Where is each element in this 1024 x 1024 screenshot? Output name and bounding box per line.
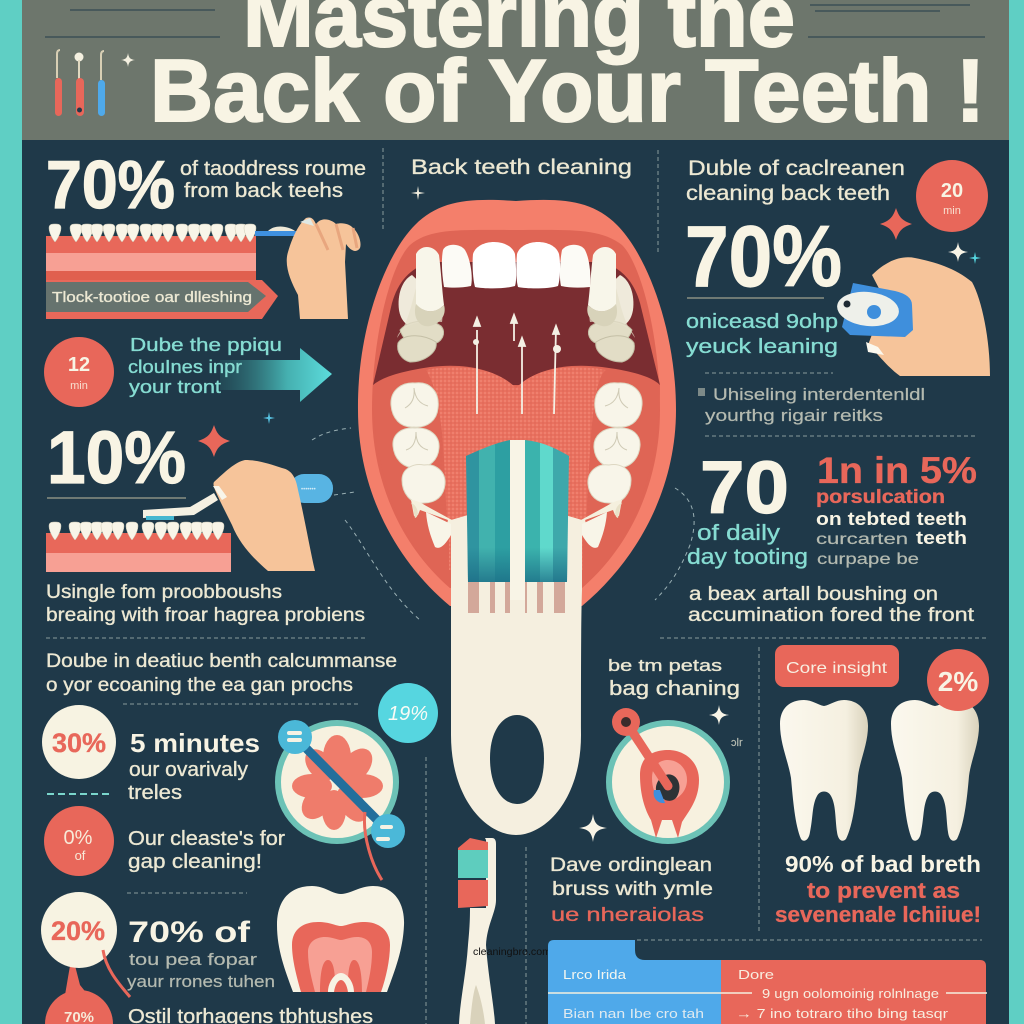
header band (22, 0, 1009, 140)
icon: gum pick diagram (609, 708, 727, 841)
text: interdental note: Uhiseling interdentenldl (713, 385, 925, 404)
text: teal note (686, 311, 838, 358)
stat: 70 daily: of daily (697, 520, 780, 545)
table: comparison: 9 ugn oolomoinig rolnlnage (762, 986, 939, 1001)
text: plaque note: clouInes inpr (128, 357, 242, 377)
arrow: teal (220, 348, 332, 402)
illustration: small toothbrush (458, 838, 496, 1024)
badge: 20 min (916, 160, 988, 232)
icon: sparkle white upper (709, 705, 729, 725)
stat: 1n in 5 percent: porsulcation (816, 487, 945, 508)
badge: 30 percent: 30% (52, 728, 106, 758)
badge: 19 percent: 19% (388, 703, 428, 725)
text: bag cleaning: be tm petas (608, 656, 722, 675)
text: bad breath (775, 851, 981, 927)
stat: 70 percent top left: from back teehs (184, 180, 343, 202)
badge: 0 percent: of (75, 848, 86, 863)
table: comparison: Bian nan Ibe cro tah (563, 1006, 704, 1021)
text: brushing note (688, 584, 975, 626)
icon: two molars (780, 700, 979, 841)
small note glyph: ɔlr (731, 737, 743, 749)
text: gap cleaning: Our cleaste's for (128, 828, 285, 850)
heading: back teeth cleaning (411, 156, 632, 200)
icon: hand with toothbrush (255, 217, 361, 319)
badge: 2 percent (927, 649, 989, 711)
badge: 12 min: min (70, 380, 88, 392)
badge: 20 min: min (943, 205, 961, 217)
stat: 1n in 5 percent: curpape be (817, 551, 919, 568)
icon: sparkle red (198, 425, 230, 457)
text: bad breath: sevenenale lchiiue! (775, 902, 981, 927)
badge: 20 percent with pin (41, 892, 130, 997)
badge: 0 percent: 0% (64, 827, 93, 849)
text: proof note (46, 582, 365, 626)
text: dave note: bruss with ymle (552, 879, 713, 900)
stat: 70 percent top left: of taoddress roume (180, 158, 366, 180)
text: brushing note: a beax artall boushing on (689, 584, 938, 605)
badge: 20 percent with pin: 20% (51, 916, 105, 946)
text: plaque note (128, 335, 282, 397)
badge: 0 percent (44, 806, 114, 876)
text: 5 minutes: 5 minutes (130, 728, 260, 758)
text: brushing note: accumination fored the front (688, 605, 975, 626)
text: teal note: yeuck leaning (686, 336, 838, 358)
text: plaque note: Dube the ppiqu (130, 335, 282, 355)
stat: 70 daily: 70 (700, 446, 789, 529)
icon: sparkle blue (263, 412, 275, 424)
gum strip with teeth (46, 224, 256, 281)
badge: 2 percent: 2% (938, 666, 978, 697)
stat: 1n in 5 percent (816, 450, 977, 568)
icon: tooth cross section (277, 886, 404, 992)
badge: 12 min (44, 337, 114, 407)
gum strip lower left (46, 522, 231, 572)
badge: 20 min: 20 (941, 180, 963, 202)
text: proof note: Usingle fom proobboushs (46, 582, 282, 603)
text: 5 minutes (128, 728, 260, 804)
badge: 12 min: 12 (68, 354, 90, 376)
text: interdental note: yourthg rigair reitks (705, 406, 883, 425)
icon: sparkles right (880, 208, 981, 264)
table: comparison: Dore (738, 967, 774, 982)
text: bad breath: to prevent as (807, 878, 960, 903)
text: 5 minutes: our ovarivaly (129, 759, 248, 781)
icon: floss diagram (278, 720, 405, 880)
text: double of clean (686, 157, 905, 205)
icon: dental tools (55, 50, 135, 116)
text: bag cleaning: bag chaning (609, 678, 740, 700)
table: comparison: Lrco Irida (563, 967, 627, 982)
text: dave note: ue nheraiolas (551, 905, 704, 926)
text: double of clean: Duble of caclreanen (688, 157, 905, 180)
text: bad breath: 90% of bad breth (785, 851, 981, 877)
text: double of clean: cleaning back teeth (686, 182, 890, 205)
illustration: big toothbrush (451, 438, 582, 835)
stat: 1n in 5 percent: teeth (916, 528, 967, 548)
text: bag cleaning (608, 656, 740, 700)
text: dave note (550, 855, 713, 926)
stat: 10 percent: 10% (47, 416, 186, 499)
stat: 1n in 5 percent: 1n in 5% (817, 450, 977, 491)
stat: 70 percent top left: 70% (46, 147, 175, 223)
right teal band (1009, 0, 1024, 1024)
text: calculus note: o yor ecoaning the ea gan prochs (46, 675, 353, 696)
text: dave note: Dave ordinglean (550, 855, 712, 876)
badge: 70 percent bottom (45, 990, 113, 1024)
text: 5 minutes: treles (128, 782, 182, 804)
illustration: open mouth (358, 200, 676, 606)
button: core insight: Core insight (786, 660, 888, 677)
stat: 70 daily: day tooting (687, 544, 808, 569)
stat: 70 daily (687, 446, 808, 569)
stat: 70 percent right: 70% (685, 209, 842, 305)
text: 70 percent of (127, 916, 275, 991)
badge: 30 percent (42, 705, 116, 779)
stat: 1n in 5 percent: on tebted teeth (816, 509, 967, 529)
text: plaque note: your tront (129, 377, 221, 397)
text: 70 percent of: tou pea fopar (129, 950, 257, 969)
icon: hand brushing teeth (143, 460, 333, 571)
icon: hand brushing teeth: ••••••• (301, 487, 316, 493)
table: comparison: → 7 ino totraro tiho bing tasqr (736, 1006, 949, 1021)
icon: sparkle white lower (579, 814, 607, 842)
button: core insight (775, 645, 899, 687)
text: 70 percent of: yaur rrones tuhen (127, 972, 275, 991)
text: gap cleaning (128, 828, 285, 873)
title: Back of Your Teeth ! (150, 41, 985, 140)
banner: Tlock-tootioe oar dlleshing (52, 289, 252, 306)
table: comparison (548, 940, 987, 1024)
stat: 70 percent top left (46, 147, 366, 223)
text: 70 percent of: 70% of (128, 916, 251, 949)
heading: back teeth cleaning: Back teeth cleaning (411, 156, 632, 179)
text: gap cleaning: gap cleaning! (128, 851, 262, 873)
text: calculus note: Doube in deatiuc benth calcummanse (46, 651, 397, 672)
text: teal note: oniceasd 9ohp (686, 311, 838, 333)
left teal band (0, 0, 22, 1024)
text: proof note: breaing with froar hagrea probiens (46, 605, 365, 626)
badge: 19 percent (378, 683, 438, 743)
icon: hand with floss pick (835, 257, 990, 376)
stat: 1n in 5 percent: curcarten (816, 531, 908, 548)
watermark: cleaningbro.com (473, 946, 551, 958)
banner (46, 280, 278, 319)
text: interdental note (698, 385, 925, 425)
text: calculus note (46, 651, 397, 696)
